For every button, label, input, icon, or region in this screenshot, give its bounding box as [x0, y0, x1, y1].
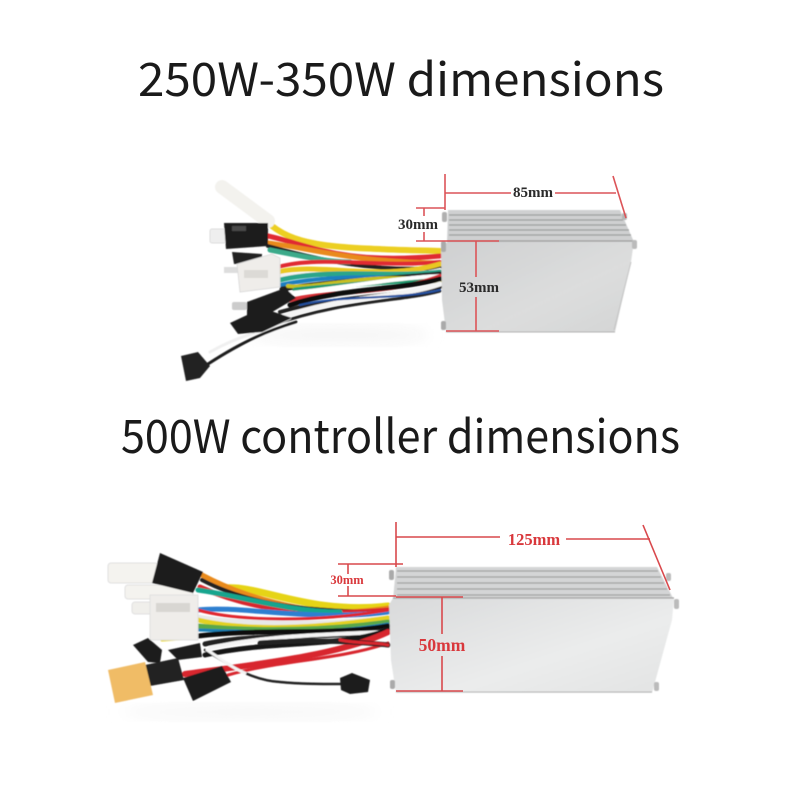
dimension: 50mm height: 50mm	[419, 635, 466, 655]
title: 250W-350W dimensions: 250W-350W dimensions	[138, 44, 664, 110]
connectors, bottom controller	[108, 553, 370, 703]
wiring harness, top controller	[208, 226, 440, 364]
dimension: 30mm depth: 30mm	[398, 217, 438, 233]
dimension: 53mm height	[445, 241, 499, 331]
dimension: 50mm height	[396, 597, 466, 691]
dimension: 30mm depth	[398, 208, 445, 241]
title: 500W controller dimensions: 500W controller dimensions	[121, 401, 680, 467]
connectors, top controller	[181, 187, 296, 381]
floor shadow	[250, 325, 430, 345]
dimension: 125mm width	[396, 522, 670, 590]
product photo: 250W-350W controller with wiring	[181, 187, 637, 381]
dimension: 53mm height: 53mm	[459, 280, 499, 296]
dimension: 30mm depth	[330, 564, 403, 596]
controller housing, 250W-350W	[441, 210, 637, 332]
product photo: 500W controller with wiring	[108, 553, 679, 720]
wiring harness, bottom controller	[162, 575, 388, 684]
controller housing, 500W	[389, 567, 679, 693]
dimension: 85mm width	[445, 174, 626, 218]
floor shadow	[120, 704, 380, 720]
dimension: 85mm width: 85mm	[513, 185, 553, 201]
dimension: 30mm depth: 30mm	[330, 573, 364, 587]
dimension: 125mm width: 125mm	[508, 530, 560, 549]
